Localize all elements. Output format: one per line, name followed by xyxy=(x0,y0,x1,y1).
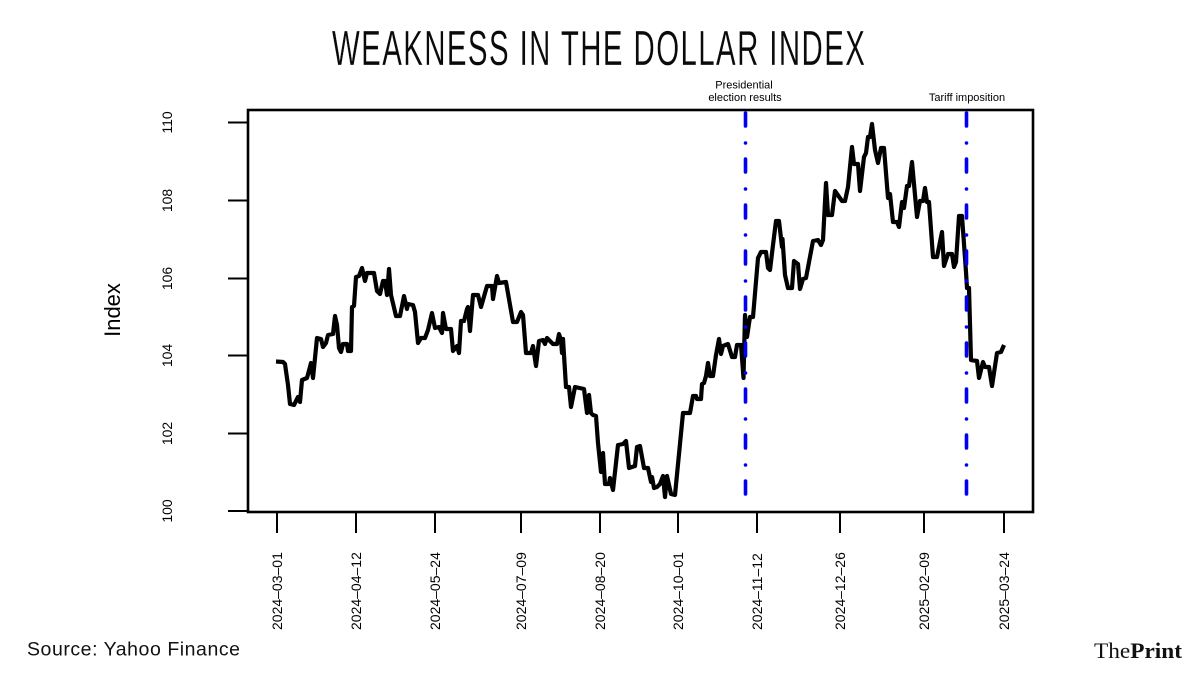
x axis date labels: 2024–07–09 xyxy=(513,552,529,630)
y axis labels: 110 xyxy=(159,111,175,134)
x axis date labels: 2025–02–09 xyxy=(916,552,932,630)
event line: presidential election results xyxy=(744,113,747,498)
x axis date labels: 2024–12–26 xyxy=(832,552,848,630)
y axis labels: 108 xyxy=(159,189,175,212)
y axis labels: 104 xyxy=(159,344,175,367)
y axis labels: 102 xyxy=(159,422,175,445)
x axis date labels: 2024–05–24 xyxy=(427,552,443,630)
x axis date labels: 2024–10–01 xyxy=(670,552,686,630)
panel: line chart xyxy=(100,80,1033,630)
x axis date labels: 2024–04–12 xyxy=(348,552,364,630)
dollar index line xyxy=(276,124,1004,497)
annotation: presidential election results: Presidential xyxy=(715,80,773,92)
title: WEAKNESS IN THE DOLLAR INDEX xyxy=(332,20,866,76)
y axis labels: 100 xyxy=(159,499,175,523)
annotation: tariff imposition: Tariff imposition xyxy=(929,92,1005,104)
event line: tariff imposition xyxy=(965,113,968,498)
x axis date labels xyxy=(269,552,1012,630)
y axis labels: 106 xyxy=(159,267,175,290)
y axis title: Index xyxy=(100,283,125,337)
source note: Source: Yahoo Finance xyxy=(27,638,240,660)
y axis labels xyxy=(159,111,175,523)
x axis date labels: 2024–11–12 xyxy=(749,553,765,630)
x axis date labels: 2025–03–24 xyxy=(996,552,1012,630)
logo: ThePrint: ThePrint xyxy=(1094,638,1183,663)
x axis ticks xyxy=(277,512,1004,533)
x axis date labels: 2024–03–01 xyxy=(269,552,285,630)
annotation: presidential election results: election results xyxy=(708,92,782,104)
y axis ticks xyxy=(228,122,248,511)
plot frame xyxy=(248,110,1033,512)
x axis date labels: 2024–08–20 xyxy=(592,552,608,630)
